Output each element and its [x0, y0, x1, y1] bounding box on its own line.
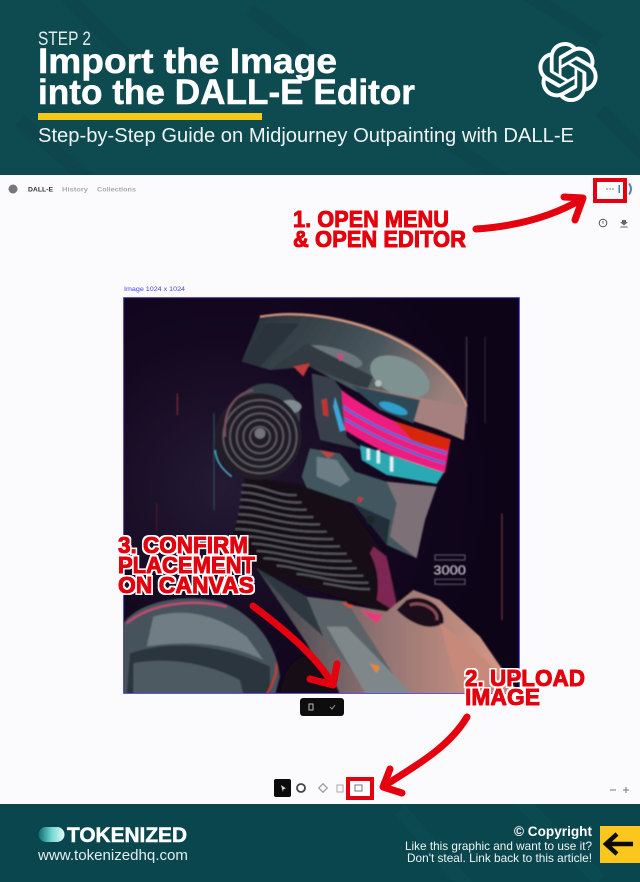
icon: download	[620, 220, 628, 228]
menu dots	[606, 188, 614, 190]
step label: STEP 2	[38, 29, 91, 50]
icon: help	[599, 219, 607, 227]
zoom controls	[610, 787, 629, 793]
canvas background	[0, 174, 640, 805]
icon: crop	[337, 785, 343, 792]
navigation labels: DALL-E	[28, 186, 54, 194]
annotation: confirm placement	[118, 532, 337, 685]
label: upload image	[465, 665, 585, 710]
robot illustration	[123, 298, 520, 695]
icon: trash	[309, 704, 313, 710]
title	[38, 42, 415, 112]
label: upload image: IMAGE	[465, 684, 540, 710]
label: open menu and open editor	[293, 206, 466, 252]
label: confirm placement on canvas: 3. CONFIRM	[118, 532, 248, 558]
label: open menu and open editor: 1. OPEN MENU	[293, 206, 449, 232]
copyright notice: Don't steal. Link back to this article!	[407, 851, 592, 865]
logo wordmark: TOKENIZED	[67, 824, 187, 847]
icon: upload image	[355, 785, 362, 791]
yellow underline	[38, 113, 262, 120]
icon: eraser	[319, 784, 327, 792]
neck	[233, 477, 403, 617]
copyright notice	[405, 823, 592, 865]
annotation: open menu	[293, 180, 625, 252]
bottom toolbar	[274, 779, 372, 798]
label: confirm placement on canvas: PLACEMENT	[118, 552, 255, 578]
lower visor band	[360, 445, 444, 484]
confirm toolbar	[300, 698, 344, 716]
navigation labels: History	[62, 186, 88, 194]
icon: hand	[297, 784, 305, 792]
annotation: upload image	[383, 665, 585, 793]
website: www.tokenizedhq.com	[37, 847, 188, 864]
helmet dome	[242, 313, 467, 440]
jaw	[301, 448, 416, 558]
chest plate	[257, 568, 520, 695]
logo mark	[39, 827, 64, 842]
robot illustration: 3000	[433, 563, 466, 578]
image size label: Image 1024 x 1024	[124, 286, 186, 293]
background streaks	[157, 337, 502, 620]
blue marker	[618, 185, 620, 193]
select tool	[274, 779, 291, 797]
visor	[333, 390, 451, 473]
icon: DALL-E logo	[8, 184, 18, 194]
navigation labels: Collections	[97, 186, 136, 194]
header panel	[0, 0, 640, 190]
label: confirm placement on canvas: ON CANVAS	[118, 572, 254, 598]
arrow to upload button	[383, 717, 467, 793]
ear piece	[240, 382, 300, 423]
subtitle: Step-by-Step Guide on Midjourney Outpainting with DALL-E	[38, 125, 574, 147]
copyright notice: © Copyright	[514, 823, 592, 839]
label: upload image: 2. UPLOAD	[465, 665, 585, 691]
icon: OpenAI logo	[538, 42, 598, 102]
label: confirm placement on canvas	[118, 532, 255, 598]
footer panel	[0, 800, 640, 882]
left shoulder	[123, 598, 280, 695]
red box: upload	[348, 779, 372, 798]
app navigation bar	[8, 184, 631, 228]
label: open menu and open editor: & OPEN EDITOR	[293, 226, 466, 252]
red box: menu	[595, 180, 625, 201]
arrow to menu	[476, 197, 583, 229]
side plate	[312, 373, 363, 450]
helmet front band	[350, 385, 467, 440]
title: Import the Image	[38, 42, 337, 81]
title: into the DALL-E Editor	[38, 73, 415, 112]
arrow to confirm toolbar	[253, 606, 337, 685]
poster lettering	[435, 555, 465, 584]
back arrow button	[600, 826, 640, 863]
copyright notice: Like this graphic and want to use it?	[405, 839, 592, 853]
navigation labels	[28, 186, 136, 194]
icon: check	[330, 705, 335, 709]
account avatar edge	[629, 184, 631, 194]
